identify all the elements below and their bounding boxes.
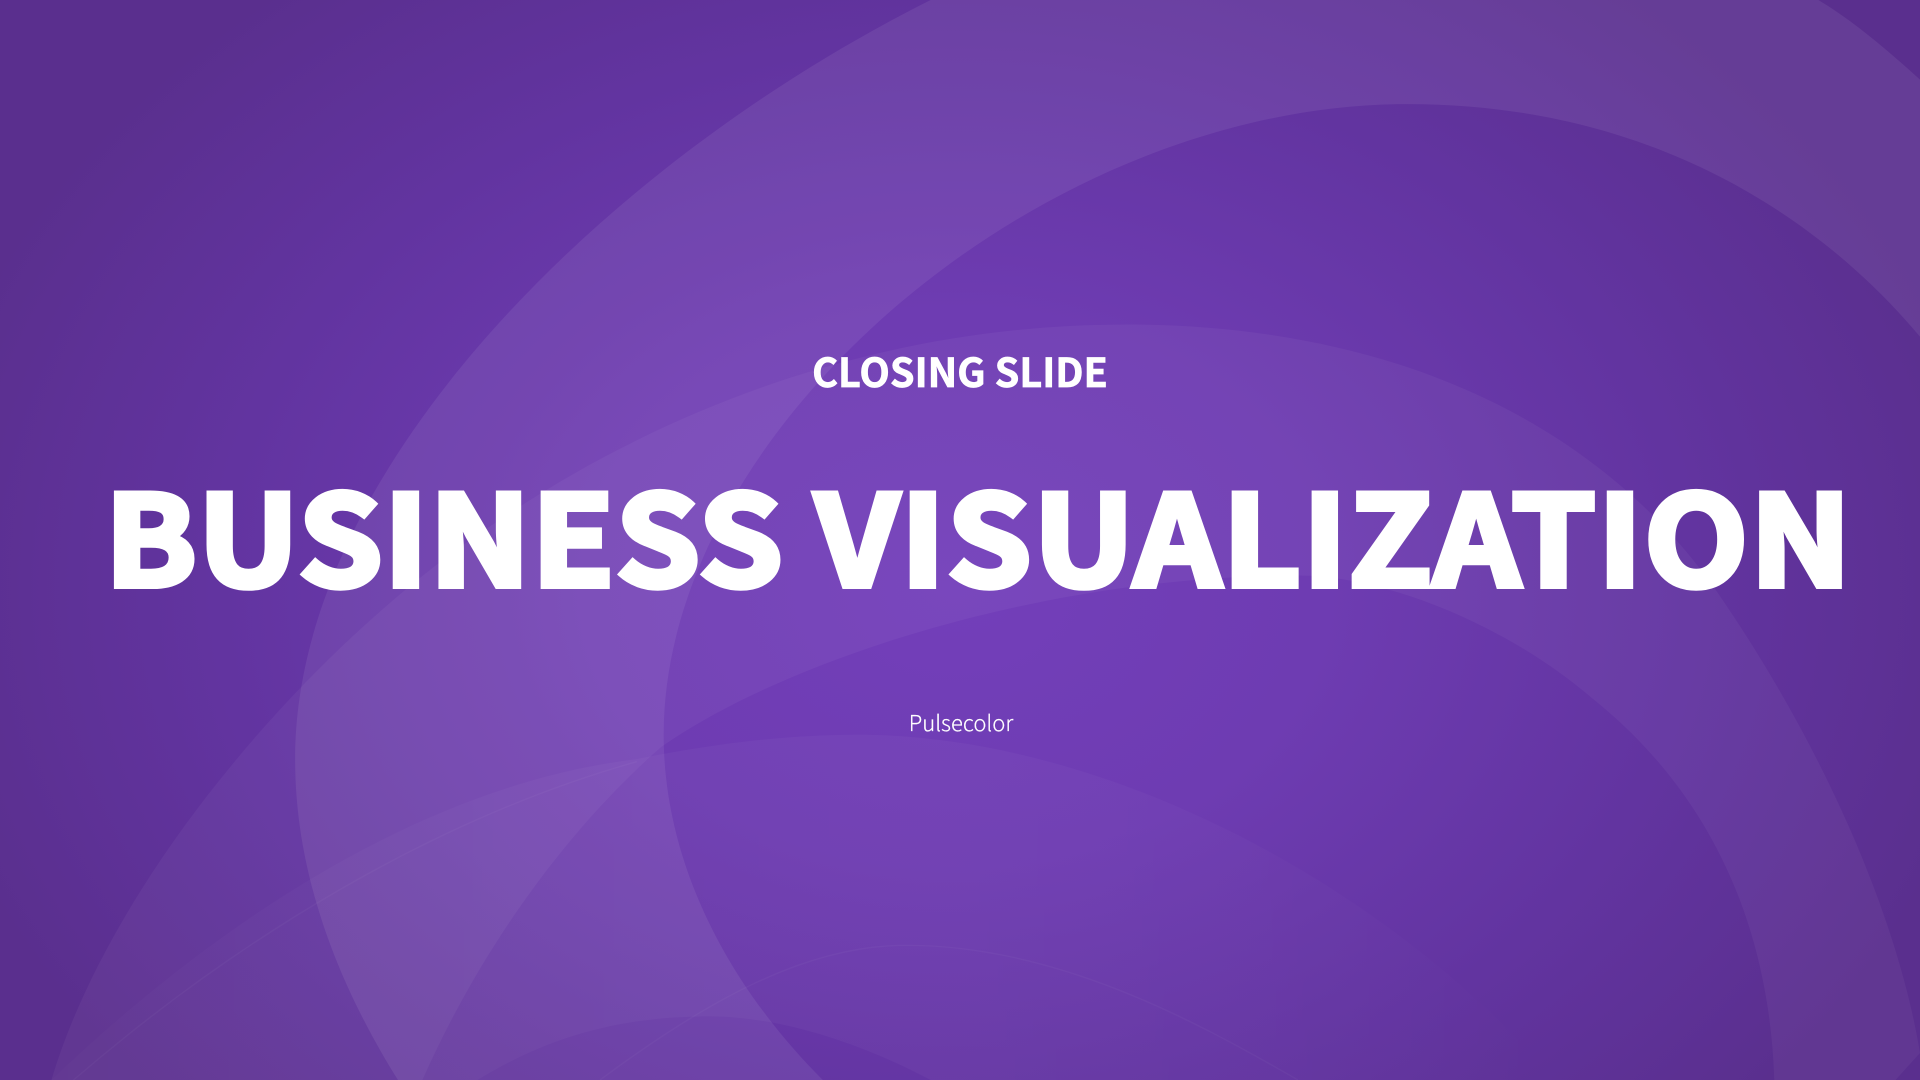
title: business visualization: BUSINESS VISUALIZATION [105, 441, 1853, 622]
subtitle: closing slide: CLOSING SLIDE [812, 342, 1108, 399]
author: pulsecolor: Pulsecolor [909, 706, 1013, 738]
